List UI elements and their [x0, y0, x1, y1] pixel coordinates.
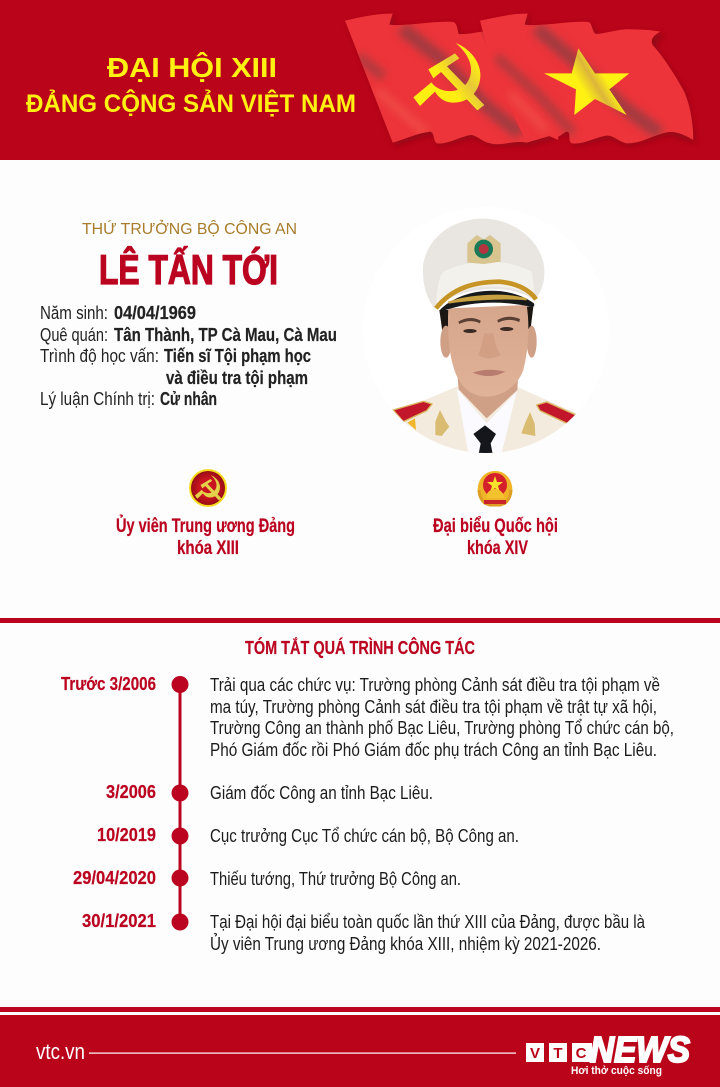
VTC News logo: NEWS — [590, 1029, 690, 1070]
role: central committee: Ủy viên Trung ương Đảng — [116, 515, 295, 537]
cap band — [436, 262, 535, 305]
personal details: Tân Thành, TP Cà Mau, Cà Mau — [114, 325, 337, 345]
hammer and sickle — [413, 43, 484, 110]
mouth — [473, 370, 505, 376]
position label: THỨ TRƯỞNG BỘ CÔNG AN — [82, 219, 297, 238]
nose — [478, 333, 501, 358]
website label: vtc.vn — [36, 1039, 85, 1064]
header title — [26, 51, 356, 118]
VTC News logo — [526, 1029, 690, 1077]
jacket — [393, 387, 577, 453]
entry: before 3/2006: Phó Giám đốc rồi Phó Giám đốc phụ trách Công an tỉnh Bạc Liêu. — [210, 740, 657, 760]
neck — [458, 378, 518, 418]
entry: 10/2019: Cục trưởng Cục Tổ chức cán bộ, Bộ Công an. — [210, 826, 519, 846]
entry: 30/1/2021 — [82, 911, 646, 954]
hair — [439, 307, 533, 333]
VTC News logo: T — [553, 1045, 563, 1062]
header title: ĐẠI HỘI XIII — [107, 51, 277, 83]
entry: 30/1/2021: Tại Đại hội đại biểu toàn quốc lần thứ XIII của Đảng, được bầu là — [210, 912, 646, 932]
role: national assembly: Đại biểu Quốc hội — [433, 516, 558, 537]
role: central committee term: khóa XIII — [177, 538, 239, 559]
personal details: Trình độ học vấn: — [40, 346, 159, 366]
party flag — [340, 10, 567, 147]
VTC News logo: Hơi thở cuộc sống — [571, 1065, 662, 1077]
flag shadow — [348, 16, 696, 146]
person name: LÊ TẤN TỚI — [99, 245, 278, 293]
face — [448, 305, 528, 397]
section heading: TÓM TẮT QUÁ TRÌNH CÔNG TÁC — [245, 637, 475, 658]
shirt — [457, 388, 517, 453]
entry: 29/04/2020 — [73, 868, 461, 889]
entry: 29/04/2020: 29/04/2020 — [73, 868, 156, 888]
yellow star — [544, 48, 629, 115]
epaulettes — [393, 401, 432, 422]
cap badge — [467, 235, 501, 264]
entry: 10/2019 — [97, 825, 519, 846]
timeline axis — [178, 684, 182, 922]
entry: 3/2006: 3/2006 — [106, 782, 156, 802]
eyes and brows — [458, 318, 481, 324]
entry: 3/2006: Giám đốc Công an tỉnh Bạc Liêu. — [210, 783, 433, 803]
header banner — [0, 0, 720, 160]
personal details: Cử nhân — [160, 389, 217, 409]
tie — [473, 425, 496, 454]
personal details: Tiến sĩ Tội phạm học — [164, 346, 311, 366]
national flag — [477, 10, 697, 147]
entry: 30/1/2021: Ủy viên Trung ương Đảng khóa XIII, nhiệm kỳ 2021-2026. — [210, 933, 601, 954]
role: national assembly term: khóa XIV — [467, 538, 528, 559]
personal details — [40, 303, 337, 409]
portrait photo — [392, 218, 576, 453]
cap cord — [436, 282, 536, 308]
collar badges — [435, 410, 449, 436]
ears — [440, 326, 452, 358]
VTC News logo: V — [530, 1045, 540, 1062]
icon: national emblem — [478, 471, 512, 506]
flags illustration — [340, 10, 697, 147]
entry: 10/2019: 10/2019 — [97, 825, 156, 845]
personal details: Lý luận Chính trị: — [40, 389, 155, 409]
footer — [0, 1007, 720, 1087]
entry: 30/1/2021: 30/1/2021 — [82, 911, 156, 931]
entry: before 3/2006 — [61, 674, 674, 760]
entry: 29/04/2020: Thiếu tướng, Thứ trưởng Bộ Công an. — [210, 869, 461, 889]
cap crown — [423, 219, 544, 309]
personal details: 04/04/1969 — [114, 303, 196, 323]
entry: 3/2006 — [106, 782, 433, 803]
VTC News logo: C — [576, 1045, 587, 1062]
personal details: Năm sinh: — [40, 303, 108, 323]
personal details: Quê quán: — [40, 325, 108, 345]
personal details: và điều tra tội phạm — [166, 368, 308, 388]
header title: ĐẢNG CỘNG SẢN VIỆT NAM — [26, 88, 356, 118]
entry: before 3/2006: Trước 3/2006 — [61, 674, 156, 694]
career timeline — [61, 674, 674, 954]
icon: party emblem — [189, 469, 227, 507]
cap visor — [439, 291, 534, 311]
